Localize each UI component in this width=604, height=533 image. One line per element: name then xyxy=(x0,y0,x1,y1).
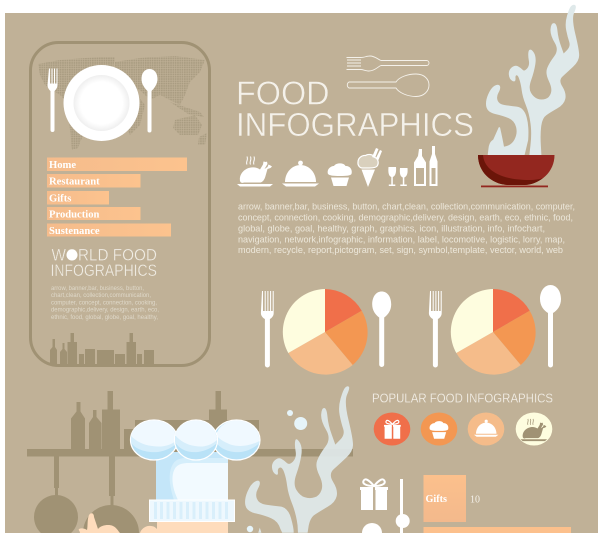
icon: muffin xyxy=(328,163,352,186)
card heading: WORLD FOOD xyxy=(52,247,157,265)
chef arm xyxy=(157,521,228,533)
icon badge: chicken xyxy=(516,412,552,446)
bar: Gifts: Gifts xyxy=(426,494,447,505)
hat puff right xyxy=(213,420,260,460)
icon: ice cream cone xyxy=(358,148,382,187)
food icon row xyxy=(237,146,438,187)
keyword paragraph: global, globe, goal, healthy, graph, graphics, icon, illustration, info, infochart, xyxy=(238,223,545,233)
icon: outline fork xyxy=(346,56,429,71)
card keyword text: demographic,delivery, design, earth, eco, xyxy=(51,308,159,314)
hat puff middle xyxy=(174,420,218,460)
timeline slider xyxy=(396,479,410,533)
icon badge: cloche xyxy=(468,412,504,446)
card keyword text: arrow, banner,bar, business, button, xyxy=(51,286,144,292)
kitchen shelf scene xyxy=(27,391,353,533)
menu bars xyxy=(47,158,187,237)
icon: steam over shelf xyxy=(245,386,353,533)
place setting with pie chart 1 xyxy=(261,289,391,375)
pie chart xyxy=(451,289,536,375)
title: INFOGRAPHICS xyxy=(236,107,474,144)
hanging pan 1 xyxy=(34,456,78,533)
icon: gift xyxy=(360,479,388,510)
bottle and box silhouette xyxy=(50,333,154,365)
icon: fork xyxy=(48,68,58,132)
bowl xyxy=(478,155,554,185)
chef hands xyxy=(79,513,157,533)
card keyword text: computer, concept, connection, cooking, xyxy=(51,300,157,306)
card keyword text: chart,clean, collection,communication, xyxy=(51,293,151,299)
bar: Restaurant: Restaurant xyxy=(49,176,100,187)
place setting with pie chart 2 xyxy=(429,285,561,375)
bar: Sustenance: Sustenance xyxy=(49,226,100,237)
card heading xyxy=(50,247,157,280)
panel: menu card xyxy=(30,42,210,366)
icon: steaming soup bowl xyxy=(478,6,578,187)
bar: Home: Home xyxy=(49,160,76,171)
card heading: INFOGRAPHICS xyxy=(50,262,157,280)
bar: Production: Production xyxy=(49,209,100,220)
heading: popular food infographics: POPULAR FOOD INFOGRAPHICS xyxy=(372,392,553,406)
icon: partial round icon xyxy=(362,523,382,533)
icon: wine glasses xyxy=(388,167,408,186)
card frame xyxy=(30,42,210,366)
keyword paragraph xyxy=(238,202,575,255)
chef with hat xyxy=(79,420,260,533)
hat band xyxy=(150,500,234,522)
keyword paragraph: navigation, network,infographic, information, label, locomotive, logistic, lorry, map, xyxy=(238,234,565,244)
shelf items xyxy=(71,391,259,449)
steam xyxy=(487,6,578,157)
icon: outline spoon xyxy=(347,74,429,96)
keyword paragraph: concept, connection, cooking, demographic,delivery, design, earth, eco, ethnic, food, xyxy=(238,213,573,223)
hanging pan 2 xyxy=(83,456,139,533)
icon badge: muffin xyxy=(421,412,457,446)
world dot map xyxy=(38,56,207,150)
card keyword text xyxy=(51,286,159,321)
icon: spoon xyxy=(372,292,391,367)
card keyword text: ethnic, food, global, globe, goal, healthy, xyxy=(51,315,158,321)
title xyxy=(236,76,474,144)
hat body xyxy=(156,452,228,502)
icon: spoon xyxy=(142,69,158,132)
bar: next xyxy=(424,527,571,533)
icon: plate xyxy=(64,65,140,141)
bar: Gifts: Gifts xyxy=(49,193,71,204)
pie chart xyxy=(283,289,368,375)
icon: cloche xyxy=(282,161,319,186)
icon: bottles xyxy=(414,146,438,186)
keyword paragraph: arrow, banner,bar, business, button, chart,clean, collection,communication, computer, xyxy=(238,202,575,212)
title: FOOD xyxy=(236,76,330,112)
icon: spoon xyxy=(540,285,561,368)
icon: fork xyxy=(261,291,274,368)
hat puff left xyxy=(130,420,178,460)
shelf board xyxy=(27,449,353,456)
icon: fork xyxy=(429,291,442,368)
bar: Gifts xyxy=(424,475,466,522)
bar chart: gifts xyxy=(360,475,571,533)
value: 10: 10 xyxy=(470,494,480,506)
keyword paragraph: modern, recycle, report,pictogram, set, sign, symbol,template, vector, world, web xyxy=(238,245,563,255)
icon: roast chicken xyxy=(237,156,273,186)
icon badge: gift xyxy=(374,412,410,446)
